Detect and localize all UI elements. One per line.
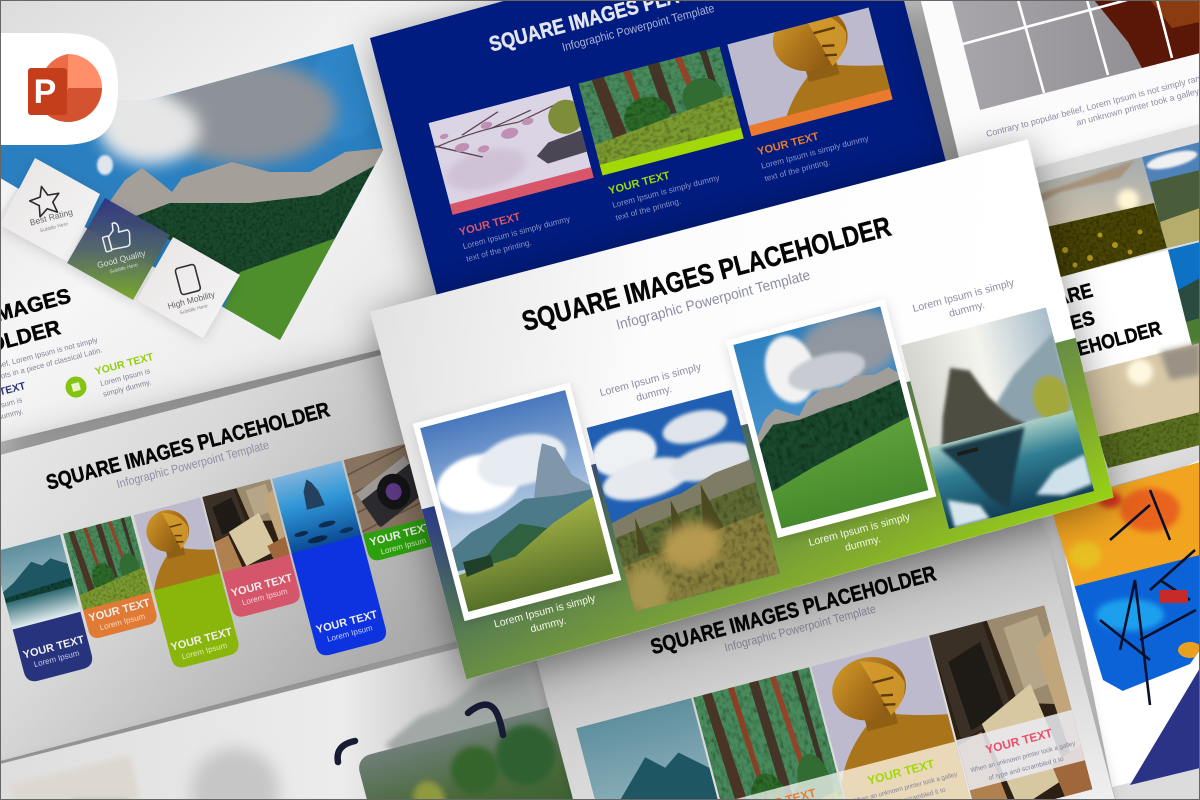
text: high mobility bbox=[166, 289, 219, 319]
subtitle: four images: Infographic Powerpoint Template bbox=[723, 602, 878, 655]
slide: grid image (top right) bbox=[920, 0, 1200, 170]
image: old photographs bbox=[929, 606, 1092, 799]
overlay: pink your text bbox=[957, 710, 1085, 790]
card: blossom: YOUR TEXT bbox=[458, 211, 522, 239]
bracket: left corner bbox=[338, 741, 355, 762]
image card 3: alps bbox=[726, 297, 951, 570]
bracket: right corner bbox=[468, 705, 503, 735]
column 1: YOUR TEXT bbox=[22, 634, 86, 661]
image card 1: valley: dummy. bbox=[529, 615, 567, 635]
photo: hills bbox=[1142, 142, 1200, 248]
column 3: Lorem Ipsum bbox=[181, 641, 228, 661]
gradient band bbox=[422, 338, 1120, 680]
overlay: orange your text bbox=[721, 773, 850, 800]
column 6 bbox=[344, 441, 442, 563]
image: abstract painting bbox=[1050, 460, 1200, 705]
title: right stacked bbox=[1015, 265, 1164, 373]
card: high mobility bbox=[137, 237, 240, 338]
photo: blue mountain bbox=[1168, 242, 1200, 345]
image: gold head bbox=[811, 636, 970, 799]
image card 2: meadow: Lorem Ipsum is simply bbox=[598, 361, 703, 399]
card: gold figure: Lorem Ipsum is simply dummy bbox=[760, 134, 870, 171]
card: best rating bbox=[0, 158, 100, 262]
slide: misty landscape (bottom left) bbox=[0, 630, 611, 800]
slide: statue and four images (bottom centre) bbox=[527, 490, 1124, 800]
item: lime your text bbox=[66, 351, 161, 399]
title: four images: SQUARE IMAGES PLACEHOLDER bbox=[648, 561, 939, 659]
title: main: SQUARE IMAGES PLACEHOLDER bbox=[519, 211, 894, 337]
slide: mountain diamond feature (top left) bbox=[0, 0, 520, 442]
image card 3: alps: Lorem Ipsum is simply bbox=[807, 511, 912, 549]
item: lime your text: simply dummy. bbox=[102, 377, 152, 399]
item: navy your text bbox=[0, 380, 33, 428]
card: forest: Lorem Ipsum is simply dummy bbox=[611, 173, 721, 210]
item: lime your text: Lorem Ipsum is bbox=[99, 366, 151, 388]
photo: sunset vineyard bbox=[1082, 343, 1200, 468]
icon: powerpoint circle: P bbox=[34, 73, 56, 111]
column 3: YOUR TEXT bbox=[170, 626, 234, 654]
column 5: YOUR TEXT bbox=[315, 609, 379, 636]
text: best rating bbox=[29, 207, 76, 236]
column 5: Lorem Ipsum bbox=[326, 623, 374, 644]
column 1: Lorem Ipsum bbox=[33, 648, 81, 669]
column 2 bbox=[63, 516, 159, 640]
title: images placeholder (left) bbox=[0, 285, 80, 379]
text: best rating: Subtitle Here bbox=[39, 221, 69, 234]
title: right stacked: PLACEHOLDER bbox=[1029, 317, 1164, 373]
card: forest: text of the printing. bbox=[615, 197, 682, 222]
panel: white title area bbox=[1057, 250, 1192, 373]
image card 4: lake: dummy. bbox=[948, 299, 986, 320]
triangle: navy accent bbox=[1130, 668, 1200, 785]
photo: mountains diamond bbox=[1, 44, 383, 340]
card fragment at far left bbox=[0, 178, 17, 213]
text: good quality bbox=[96, 248, 149, 278]
subtitle: main: Infographic Powerpoint Template bbox=[615, 267, 812, 334]
card: gold figure bbox=[704, 0, 978, 264]
text: high mobility: High Mobility bbox=[166, 289, 217, 311]
text: high mobility: Subtitle Here bbox=[179, 303, 209, 316]
fog mountains bbox=[10, 670, 540, 800]
title: right stacked: SQUARE bbox=[1015, 280, 1095, 321]
slide: sunflowers and title (right) bbox=[1015, 124, 1200, 486]
icon: star bbox=[27, 183, 63, 218]
panel: lower right grey bbox=[1112, 766, 1200, 800]
card: blossom: Lorem Ipsum is simply dummy bbox=[462, 214, 572, 251]
text: good quality: Good Quality bbox=[96, 248, 147, 270]
icon: thumbs up bbox=[100, 220, 133, 252]
text: best rating: Best Rating bbox=[29, 207, 74, 228]
column 6: Lorem Ipsum bbox=[380, 536, 427, 556]
card: forest: YOUR TEXT bbox=[607, 170, 671, 197]
column 4 bbox=[202, 479, 302, 619]
image card 1: valley bbox=[413, 383, 629, 651]
photo: rounded tropical forest bbox=[356, 700, 611, 800]
column 5 bbox=[272, 461, 389, 658]
column 2: Lorem Ipsum bbox=[99, 612, 146, 632]
card: gold figure: YOUR TEXT bbox=[756, 131, 820, 158]
slide: painting (bottom right) bbox=[1050, 460, 1200, 800]
column 6: YOUR TEXT bbox=[368, 521, 433, 549]
image card 1: valley: Lorem Ipsum is simply bbox=[493, 592, 597, 631]
overlay: lime your text: YOUR TEXT bbox=[866, 757, 937, 788]
subtitle: six columns: Infographic Powerpoint Template bbox=[115, 438, 271, 491]
icon: phone bbox=[175, 264, 201, 295]
badge: powerpoint logo bbox=[0, 33, 118, 145]
image card 4: lake: Lorem Ipsum is simply bbox=[911, 277, 1016, 315]
image: segmented grid bbox=[952, 0, 1200, 110]
title: right stacked: IMAGES bbox=[1022, 307, 1097, 347]
slide: six image columns (left middle) bbox=[0, 328, 559, 772]
column 4: Lorem Ipsum bbox=[241, 587, 289, 607]
overlay: pink your text: YOUR TEXT bbox=[984, 726, 1055, 757]
text: good quality: Subtitle Here bbox=[109, 262, 139, 275]
item: lime your text: YOUR TEXT bbox=[94, 351, 155, 378]
image card 3: alps: dummy. bbox=[844, 533, 882, 554]
column 1 bbox=[0, 534, 95, 684]
card: blossom bbox=[428, 84, 612, 264]
overlay: pink your text: When an unknown printer took a galley bbox=[970, 740, 1077, 774]
card: blossom: text of the printing. bbox=[465, 238, 533, 264]
overlay: lime your text bbox=[839, 742, 971, 800]
image card 2: meadow: dummy. bbox=[635, 383, 673, 404]
image: forest bbox=[693, 667, 844, 799]
card: forest bbox=[573, 26, 756, 223]
slide: navy three images (top centre) bbox=[370, 0, 978, 338]
image card 2: meadow bbox=[574, 354, 787, 623]
card: gold figure: text of the printing. bbox=[764, 158, 831, 183]
image: teal mountains bbox=[576, 698, 718, 799]
slide: main square images placeholder bbox=[370, 139, 1124, 680]
photo: sunflower field bbox=[1030, 157, 1167, 278]
column 2: YOUR TEXT bbox=[87, 597, 152, 625]
title: six columns: SQUARE IMAGES PLACEHOLDER bbox=[44, 398, 332, 495]
overlay: pink your text: of type and scrambled it to bbox=[988, 756, 1065, 782]
column 4: YOUR TEXT bbox=[230, 572, 294, 600]
column 3 bbox=[107, 491, 268, 677]
image card 4: lake bbox=[891, 271, 1094, 529]
card: good quality bbox=[67, 198, 170, 300]
